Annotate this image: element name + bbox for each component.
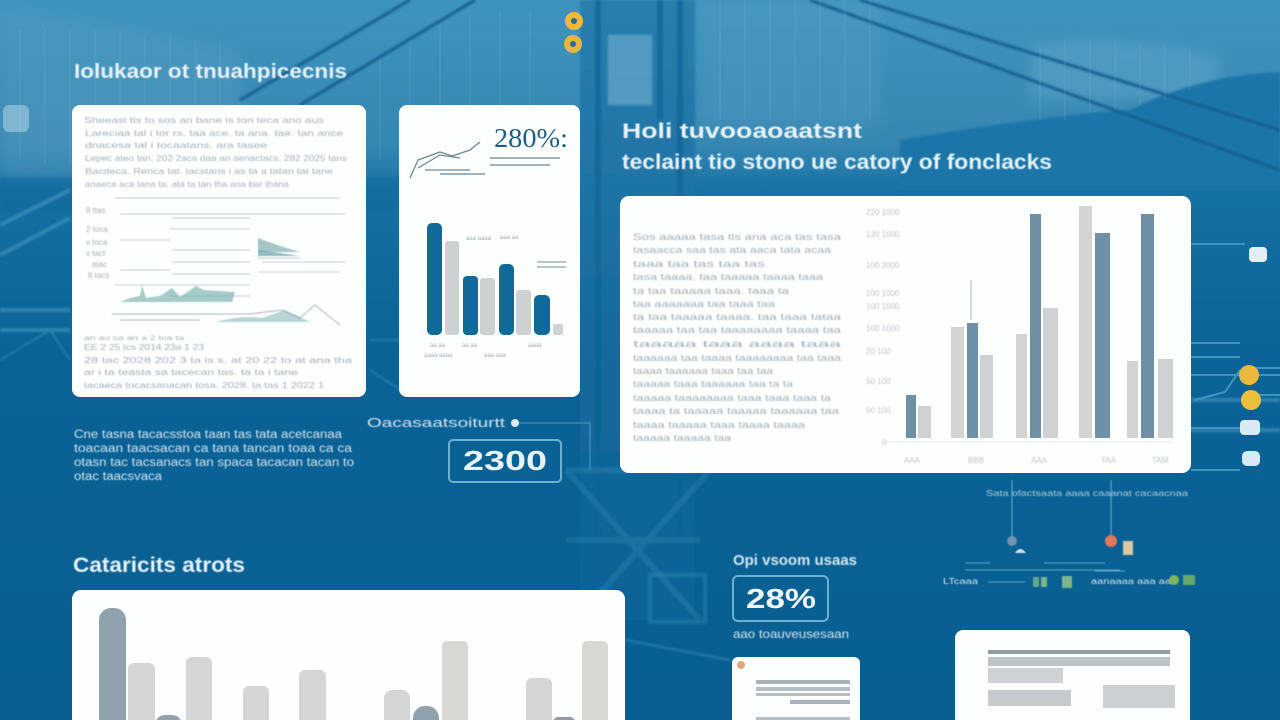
text block: left note: Cne tasna tacacsstoa taan tas tata acetcanaa: [74, 429, 343, 441]
chart: table and sparklines: v toca: [86, 238, 108, 247]
stat: 280%: 280%:: [494, 123, 568, 153]
chart axis labels: TAA: [1101, 456, 1117, 465]
panel: top center bar chart card: [399, 105, 580, 397]
text block: card intro: Lepec ateo tan. 202 2aca daa an aenactacs. 282 2025 tans: [85, 153, 347, 163]
line chart: [410, 142, 480, 178]
chart axis labels: 20 100: [866, 347, 891, 356]
text block: card footnote: an ao ca an a 2 tca ta: [84, 336, 185, 342]
text block: right card body: ta taa taaaaa taaaa. taa taaa tataa: [633, 312, 841, 322]
stat box: 2300: [449, 440, 561, 482]
chart axis labels: 100 1000: [866, 289, 900, 298]
panel: top center bar chart card: aaa aaaa: [466, 236, 492, 242]
bar chart: [427, 223, 563, 335]
text block: right card body: taaaa ta taaaaa taaaaa taaaaaa taa: [633, 406, 839, 416]
legend strip: right: [943, 480, 1195, 588]
panel: top center bar chart card: aaaa aaaa: [424, 353, 453, 359]
stat box: 28%: [733, 576, 828, 621]
chart: table and sparklines: atac: [92, 260, 107, 269]
text block: card intro: Sheeasi tis to sos an bane is ton teca ano aus: [84, 115, 324, 125]
chart axis labels: 100 1000: [866, 324, 900, 333]
panel: top center bar chart card: aaaa: [528, 343, 542, 349]
caption: center stat: Oacasaatsoiturtt: [367, 415, 506, 430]
panel: top left text card: [72, 105, 366, 397]
panel: large bottom card: [955, 630, 1190, 720]
chart axis labels: AAA: [1031, 456, 1048, 465]
chart: table and sparklines: v tact: [86, 249, 106, 258]
panel: top center bar chart card: aaa aaa: [484, 353, 506, 359]
icon: white speech: [1242, 451, 1260, 466]
bar chart: [886, 206, 1173, 442]
panel: top center bar chart card: aaa aa: [500, 235, 519, 241]
text block: right card body: taaaaa taa taa taaaaaaaa taaaa taa: [633, 325, 841, 335]
legend strip: right: aanaaaa aaa aa: [1091, 577, 1172, 586]
text block: right card body: taaaa taaaaaa taaa taa taa: [633, 366, 773, 376]
chart: table and sparklines: 8 ttas: [86, 206, 106, 215]
panel: top center bar chart card: aa aa: [462, 343, 478, 349]
text block: card footnote: tacaeca tocacsanacan tosa. 2028. ta tas 1 2022 1: [84, 380, 324, 390]
text block: right card body: taaaa taaaaa taaa taaaa taaaa: [633, 420, 805, 430]
text block: right card body: taa aaaaaaa taa taaa taa: [633, 299, 775, 309]
heading: right: teclaint tio stono ue catory of fonclacks: [622, 151, 1052, 174]
heading: right: [622, 120, 1052, 174]
chart axis labels: AAA: [904, 456, 921, 465]
text block: card intro: [84, 115, 347, 189]
text block: left note: otac taacsvaca: [74, 471, 163, 483]
text block: right card body: Sos aaaaa tasa tis ana aca tas tasa: [633, 232, 841, 242]
text block: right card body: tasaacca saa tas ata aaca tata acaa: [633, 245, 831, 255]
chart axis labels: BBB: [968, 456, 984, 465]
legend strip: right: LTcaaa: [943, 577, 979, 586]
text block: left note: toacaan taacsacan ca tana tancan toaa ca ca: [74, 443, 353, 455]
text block: right card body: taaaaa taaaaa taa: [633, 433, 731, 443]
text block: card footnote: EE 2 25 tcs 2014 23a 1 23: [84, 342, 204, 352]
text block: left note: otasn tac tacsanacs tan spaca tacacan tacan to: [74, 457, 354, 469]
text block: card intro: anaeca aca tana ta. ata ta tan tha ana bar thana: [85, 179, 289, 189]
text block: card footnote: [84, 336, 352, 390]
panel: small bottom card: [732, 657, 860, 720]
text block: left note: [74, 429, 354, 483]
text block: right card body: taaaaa taaa aaaa taaa: [633, 339, 841, 349]
heading: bottom left: Cataricits atrots: [73, 554, 245, 577]
text block: right card body: taaa taa tas taa tas: [633, 259, 766, 269]
caption: [440, 158, 560, 174]
icon: left badge: [3, 105, 29, 132]
chart axis labels: TAM: [1152, 456, 1169, 465]
text block: card intro: Lareciaa tal i tor rs. taa ace. ta ana. tae. tan ance: [85, 128, 343, 138]
panel: top center bar chart card: aa aa: [430, 343, 446, 349]
chart axis labels: 0: [882, 438, 887, 447]
chart axis labels: 100 1000: [866, 302, 900, 311]
text block: right card body: taaaaaa taa taaaa taaaaaaaa taa taaa: [633, 353, 841, 363]
chart: table and sparklines: [86, 198, 345, 325]
chart axis labels: 100 2000: [866, 261, 900, 270]
icon: yellow dots: [1241, 390, 1261, 410]
icon: white chip: [1249, 247, 1267, 262]
heading: right: Holi tuvooaoaatsnt: [622, 120, 862, 143]
text block: right card body: tasa taaaa. taa taaaaa taaaa taaa: [633, 272, 823, 282]
caption: 28% stat: Opi vsoom usaas: [733, 552, 857, 569]
text block: card intro: dnacesa tal i tocaatans. ara tasee: [85, 140, 267, 150]
text block: right card body: [633, 232, 841, 443]
chart axis labels: 50 100: [866, 406, 891, 415]
chart: table and sparklines: 8 tacs: [88, 271, 109, 280]
text block: card footnote: ar i ta teasta sa tacecan tas. ta ta i tane: [84, 367, 298, 377]
text block: card footnote: 28 tac 2028 202 3 ta is s. at 20 22 to at ana tha: [84, 355, 352, 365]
right side connectors and icons: [1191, 244, 1280, 470]
text block: card intro: Bacdeca. Renca tat. tacstans i as ta a tatan tat tane: [85, 166, 333, 176]
chart axis labels: 120 1000: [866, 230, 900, 239]
text block: right card body: ta taa taaaaa taaa. taaa ta: [633, 286, 789, 296]
text block: right card body: taaaaa taaaaaaaa taaa taaa taaa ta: [633, 393, 831, 403]
text block: right card body: taaaaa taaa taaaaaa taa ta ta: [633, 379, 793, 389]
panel: bottom left bar chart card: [72, 590, 625, 720]
stat box: 2300: 2300: [463, 445, 547, 476]
chart axis labels: 220 1000: [866, 208, 900, 217]
chart axis labels: [866, 208, 1169, 465]
chart axis labels: 50 100: [866, 377, 891, 386]
icons: top yellow markers: [564, 12, 583, 53]
heading: top left: Iolukaor ot tnuahpicecnis: [74, 61, 347, 83]
stat box: 28%: 28%: [746, 583, 816, 614]
caption: below stat: aao toauveusesaan: [733, 627, 849, 641]
chart: table and sparklines: 2 toca: [86, 225, 108, 234]
icon: white badge: [1240, 420, 1260, 435]
icon: yellow face: [1239, 365, 1259, 385]
caption: Sata ofactsaata aaaa caaanat cacaacnaa: [986, 488, 1188, 498]
panel: right chart card: [620, 196, 1191, 473]
